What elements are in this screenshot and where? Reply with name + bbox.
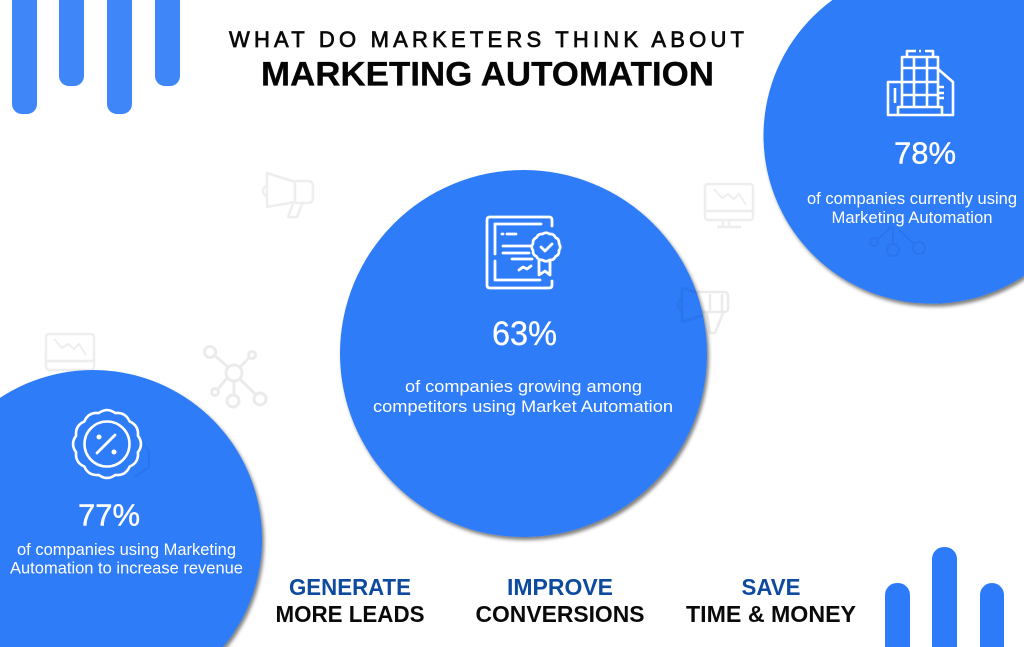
benefit: save time and money: SAVE — [742, 574, 800, 600]
description: 63%: competitors using Market Automation — [373, 398, 673, 416]
icon: faint shape behind badge — [135, 443, 149, 477]
description: 77%: Automation to increase revenue — [10, 560, 243, 578]
title: WHAT DO MARKETERS THINK ABOUT — [229, 27, 744, 52]
description: 77% — [10, 541, 243, 578]
icon: faint megaphone — [263, 173, 313, 217]
title: MARKETING AUTOMATION — [261, 56, 714, 94]
benefit: save time and money: TIME & MONEY — [686, 601, 856, 627]
description: 63%: of companies growing among — [405, 378, 642, 396]
icon: faint monitor lower — [46, 334, 94, 370]
benefit: improve conversions — [476, 574, 644, 627]
benefit: improve conversions: IMPROVE — [507, 574, 613, 600]
icon: faint megaphone behind circle edge — [697, 292, 728, 333]
icon: percent badge — [73, 410, 141, 478]
description: 78%: Marketing Automation — [832, 209, 992, 227]
description: 78%: of companies currently using — [807, 190, 1017, 208]
decorative bars: bottom right — [885, 547, 1004, 647]
icon: building — [888, 51, 953, 115]
stat: 78%: 78% — [894, 136, 956, 170]
benefit: generate more leads: MORE LEADS — [276, 601, 424, 627]
icon: faint monitor upper — [705, 184, 753, 227]
panel: 63% circle — [340, 170, 707, 537]
benefit: generate more leads — [276, 574, 424, 627]
panel: 77% circle — [0, 370, 262, 647]
description: 78% — [807, 190, 1017, 227]
stat: 77%: 77% — [78, 498, 140, 532]
icon: faint megaphone on blue — [678, 288, 704, 322]
benefit: save time and money — [686, 574, 856, 627]
icon: faint network on circle — [870, 227, 925, 256]
icon: certificate — [487, 217, 560, 288]
icon: faint network — [204, 346, 266, 407]
benefit: generate more leads: GENERATE — [289, 574, 411, 600]
panel: 78% circle — [764, 0, 1024, 304]
description: 77%: of companies using Marketing — [17, 541, 236, 559]
title — [229, 27, 744, 94]
stat: 63%: 63% — [492, 315, 557, 353]
benefit: improve conversions: CONVERSIONS — [476, 601, 644, 627]
description: 63% — [373, 378, 673, 416]
decorative bars: top left — [12, 0, 180, 114]
